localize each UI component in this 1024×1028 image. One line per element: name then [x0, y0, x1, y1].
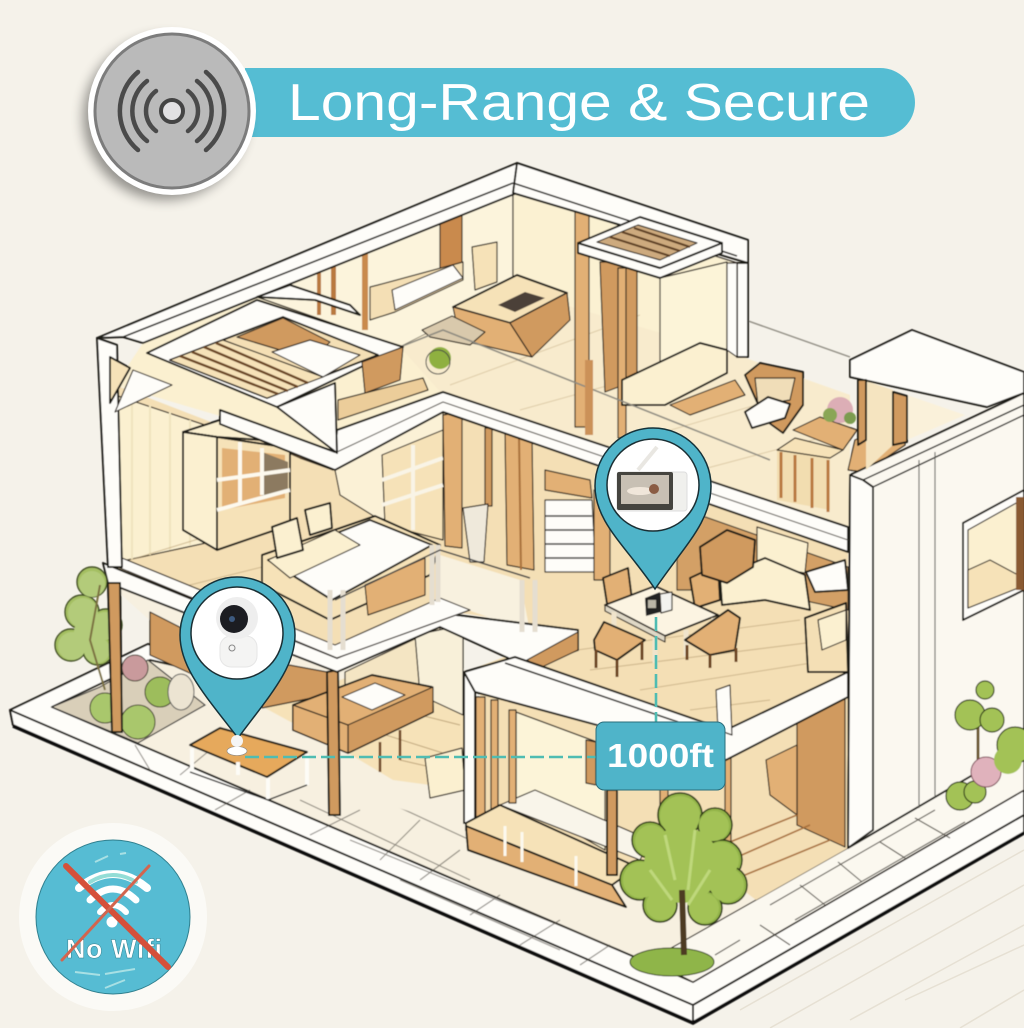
front room	[464, 672, 730, 907]
back right room	[725, 695, 848, 900]
icon: video monitor	[617, 447, 687, 511]
pin: camera location	[180, 577, 295, 756]
upper level interior	[115, 193, 905, 530]
shelf unit	[183, 420, 290, 550]
icon: baby camera	[216, 597, 258, 667]
icon: camera on table	[227, 735, 247, 756]
column near garden	[108, 580, 122, 732]
mid level interior	[108, 385, 848, 730]
ground level interior	[108, 583, 470, 830]
trees right	[946, 681, 1024, 810]
icon: signal badge	[83, 27, 256, 200]
right side block	[848, 330, 1024, 848]
title banner: Long-Range & Secure	[288, 74, 870, 132]
sofa and side furniture	[700, 527, 848, 672]
tree left	[55, 567, 122, 732]
title banner	[245, 68, 915, 137]
upper floor slab	[97, 163, 848, 567]
distance label: 1000ft	[607, 737, 714, 774]
ground slab	[10, 644, 1024, 1023]
garden bed left	[52, 655, 205, 743]
column near desk	[327, 670, 340, 815]
bed	[262, 503, 440, 620]
dashed range line vertical	[655, 617, 657, 722]
pin: monitor location	[595, 428, 711, 589]
icon: red cross	[62, 866, 168, 967]
canopy over the stairs	[578, 217, 722, 278]
tree front	[620, 793, 747, 976]
no wifi text: No Wifi	[66, 934, 162, 964]
coffee table	[190, 728, 307, 800]
dining set	[594, 565, 740, 677]
paving tiles	[135, 745, 1024, 982]
dashed range line horizontal	[245, 756, 597, 758]
icon: wifi	[79, 874, 147, 926]
distance label	[596, 722, 725, 790]
mid floor slab	[103, 545, 848, 760]
no wifi badge	[19, 823, 207, 1011]
canopy over the loft bed	[147, 285, 403, 453]
window	[963, 490, 1024, 620]
